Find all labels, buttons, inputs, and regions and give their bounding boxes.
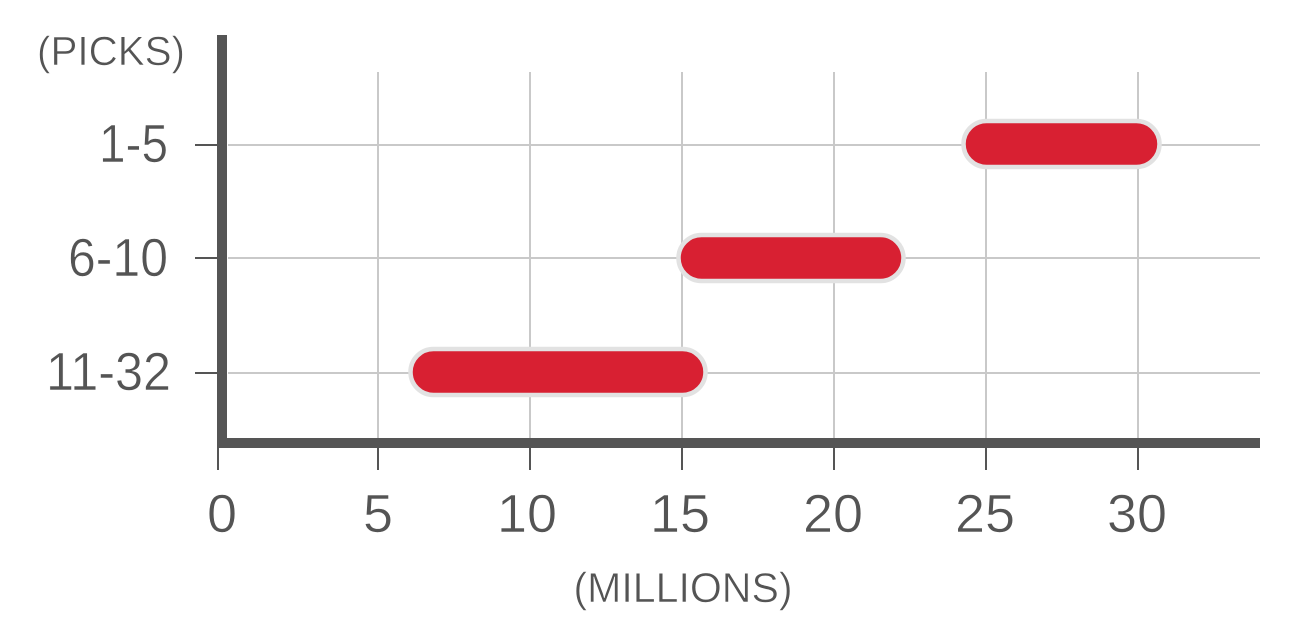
bar: picks 1-5 [964,121,1160,167]
bar: picks 11-32 [410,349,706,395]
x axis title: (MILLIONS) [574,564,792,611]
x axis labels [207,484,1167,544]
x axis labels: 10 [497,484,557,544]
bar: picks 6-10 [678,235,904,281]
x axis labels: 0 [207,484,237,544]
x axis labels: 25 [955,484,1015,544]
x axis labels: 5 [363,484,393,544]
y axis labels [46,114,171,402]
x axis line [217,438,1260,448]
x axis labels: 20 [803,484,863,544]
y axis title: (PICKS) [37,28,185,74]
y axis line [217,35,227,448]
x axis labels: 15 [650,484,710,544]
x axis labels: 30 [1107,484,1167,544]
y axis labels: 1-5 [99,114,168,174]
y axis labels: 6-10 [68,228,168,288]
y axis labels: 11-32 [46,342,171,402]
